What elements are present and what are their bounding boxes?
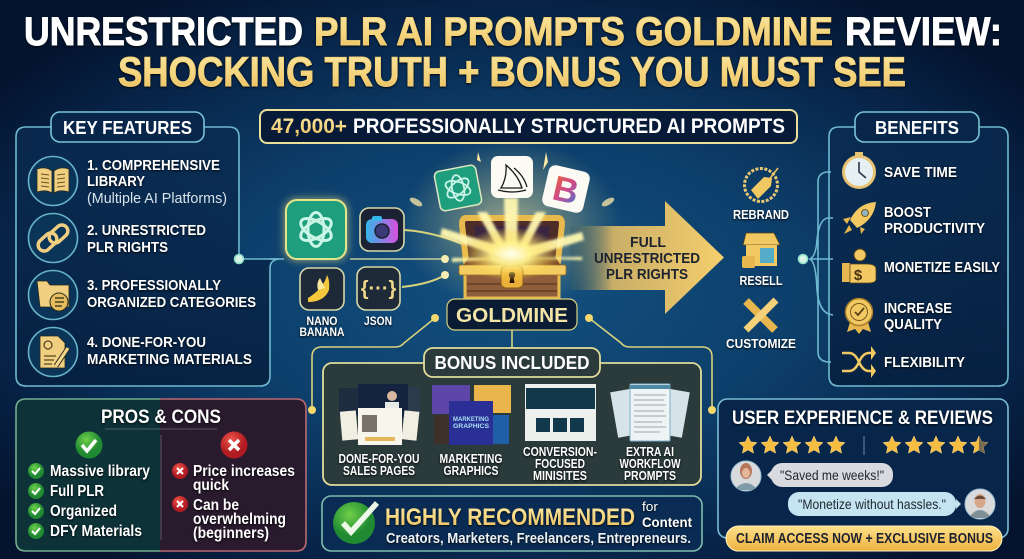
panel: pros and cons xyxy=(16,399,306,551)
feature 1: library: 1. COMPREHENSIVE xyxy=(87,157,220,174)
icon: big check xyxy=(333,502,377,544)
bonus: workflow prompts: WORKFLOW xyxy=(620,456,681,471)
panel: user experience and reviews xyxy=(718,399,1008,538)
callout: highly recommended: Content xyxy=(642,514,692,530)
benefit: increase quality: INCREASE xyxy=(884,300,952,317)
pros list: Massive library xyxy=(50,463,150,480)
callout: highly recommended: HIGHLY RECOMMENDED xyxy=(385,504,635,531)
heading: key features: KEY FEATURES xyxy=(63,118,192,138)
rights: rebrand: REBRAND xyxy=(733,207,789,222)
benefit: monetize easily xyxy=(842,249,1000,284)
cons list: Can be xyxy=(193,497,239,514)
arrow: full unrestricted PLR rights: UNRESTRICTED xyxy=(594,250,700,267)
banner: 47,000+ prompts: 47,000+ xyxy=(271,115,347,138)
connectors to goldmine xyxy=(270,230,712,410)
chest halo xyxy=(402,140,622,310)
review: monetize without hassles xyxy=(788,489,995,519)
title xyxy=(24,10,1002,95)
feature 2: chain link: PLR RIGHTS xyxy=(87,239,168,256)
label: goldmine xyxy=(447,299,577,330)
cons list: Price increases xyxy=(193,463,295,480)
banner: 47,000+ prompts: PROFESSIONALLY STRUCTURED AI PROMPTS xyxy=(353,115,785,138)
feature 4: document and pencil xyxy=(28,328,252,376)
bonus: sales pages xyxy=(338,384,420,478)
connector dot xyxy=(234,254,244,264)
bonus: marketing graphics: MARKETING xyxy=(440,451,502,466)
feature 1: library xyxy=(28,156,227,207)
feature 4: document and pencil: 4. DONE-FOR-YOU xyxy=(87,334,206,351)
icon: goldmine treasure chest xyxy=(440,198,584,298)
feature 3: folder: ORGANIZED CATEGORIES xyxy=(87,294,256,311)
title: UNRESTRICTED xyxy=(24,10,303,54)
feature 3: folder: 3. PROFESSIONALLY xyxy=(87,277,221,294)
rights: rebrand xyxy=(733,168,789,222)
arrow: full unrestricted PLR rights xyxy=(570,201,724,314)
rights: customize: CUSTOMIZE xyxy=(726,336,796,351)
cons list: quick xyxy=(193,477,229,494)
bonus: sales pages: DONE-FOR-YOU xyxy=(338,451,420,466)
review: saved me weeks xyxy=(731,461,893,491)
icon: camera app xyxy=(360,208,404,251)
icon: chatgpt small xyxy=(434,164,482,212)
bonus: minisites: MINISITES xyxy=(533,468,587,483)
benefit: save time xyxy=(844,152,957,188)
cons list xyxy=(172,432,295,542)
heading: pros and cons: PROS & CONS xyxy=(101,407,221,428)
icon: json: {···} xyxy=(361,278,396,300)
arrow: full unrestricted PLR rights: PLR RIGHTS xyxy=(606,266,688,283)
banner: 47,000+ prompts xyxy=(260,110,797,143)
cons list: (beginners) xyxy=(193,525,269,542)
label: goldmine: GOLDMINE xyxy=(456,304,568,327)
sparkles xyxy=(408,152,616,208)
heading: benefits xyxy=(855,112,979,142)
benefit: increase quality xyxy=(846,298,952,334)
connector dots xyxy=(308,255,716,414)
callout: highly recommended: Creators, Marketers, Freelancers, Entrepreneurs. xyxy=(386,531,691,547)
panel: benefits xyxy=(798,112,1008,386)
heading: benefits: BENEFITS xyxy=(875,118,959,138)
feature 2: chain link: 2. UNRESTRICTED xyxy=(87,222,206,239)
icon: nano banana: NANO xyxy=(306,316,338,328)
feature 1: library: LIBRARY xyxy=(87,173,145,190)
benefits bracket xyxy=(798,172,833,362)
title: REVIEW: xyxy=(845,10,1002,54)
rights: customize xyxy=(726,300,796,351)
benefit: boost productivity: PRODUCTIVITY xyxy=(884,220,985,237)
bonus: marketing graphics: MARKETING xyxy=(453,416,489,423)
rights: resell xyxy=(740,233,783,288)
star rating xyxy=(739,436,988,455)
title: PLR AI PROMPTS GOLDMINE xyxy=(314,10,833,54)
rights: resell: RESELL xyxy=(740,273,783,288)
icon: json xyxy=(357,267,400,328)
icon: bolt B logo: B xyxy=(549,169,582,212)
bonus: marketing graphics: GRAPHICS xyxy=(444,463,499,478)
benefit: flexibility xyxy=(842,346,965,378)
panel: bonus included xyxy=(323,348,701,485)
icon: midjourney sailboat xyxy=(491,156,533,198)
icon: nano banana: BANANA xyxy=(300,327,344,339)
bonus: marketing graphics: GRAPHICS xyxy=(453,423,490,430)
callout: highly recommended: for xyxy=(642,500,658,514)
heading: bonus included xyxy=(424,348,600,377)
bonus: workflow prompts: EXTRA AI xyxy=(626,444,674,459)
bonus: workflow prompts: PROMPTS xyxy=(624,468,676,483)
bonus: minisites xyxy=(523,384,597,483)
review: saved me weeks: "Saved me weeks!" xyxy=(780,467,884,483)
feature 4: document and pencil: MARKETING MATERIALS xyxy=(87,351,252,368)
bonus: marketing graphics xyxy=(432,385,511,478)
icon: bolt B logo xyxy=(541,164,591,214)
feature 3: folder xyxy=(28,270,256,320)
benefit: boost productivity: BOOST xyxy=(884,204,931,221)
heading: user experience: USER EXPERIENCE & REVIEWS xyxy=(732,408,993,429)
review: monetize without hassles: "Monetize without hassles." xyxy=(798,496,946,512)
pros list: Full PLR xyxy=(50,483,104,500)
heading: key features xyxy=(51,112,204,142)
icon: nano banana xyxy=(300,268,344,339)
feature 1: library: (Multiple AI Platforms) xyxy=(87,191,227,207)
heading: bonus included: BONUS INCLUDED xyxy=(434,353,590,373)
title: SHOCKING TRUTH + BONUS YOU MUST SEE xyxy=(118,48,906,95)
bonus: minisites: FOCUSED xyxy=(535,456,585,471)
pros list: Organized xyxy=(50,503,117,520)
bonus: minisites: CONVERSION- xyxy=(523,444,597,459)
bonus: sales pages: SALES PAGES xyxy=(343,463,415,478)
icon: json: JSON xyxy=(364,316,392,328)
benefit: monetize easily: $ xyxy=(854,267,863,284)
benefit: boost productivity xyxy=(843,202,985,237)
panel: key features xyxy=(16,112,279,386)
pros list xyxy=(28,432,150,540)
benefit: save time: SAVE TIME xyxy=(884,164,957,181)
benefit: increase quality: QUALITY xyxy=(884,316,942,333)
callout: highly recommended xyxy=(322,496,702,551)
bonus: workflow prompts xyxy=(610,384,690,483)
button: claim access xyxy=(726,526,1002,551)
feature 2: chain link xyxy=(28,214,206,262)
icon: chatgpt large xyxy=(284,198,348,261)
arrow: full unrestricted PLR rights: FULL xyxy=(630,234,666,251)
cons list: overwhelming xyxy=(193,511,286,528)
benefit: flexibility: FLEXIBILITY xyxy=(884,354,965,371)
pros list: DFY Materials xyxy=(50,523,142,540)
benefit: monetize easily: MONETIZE EASILY xyxy=(884,259,1000,276)
